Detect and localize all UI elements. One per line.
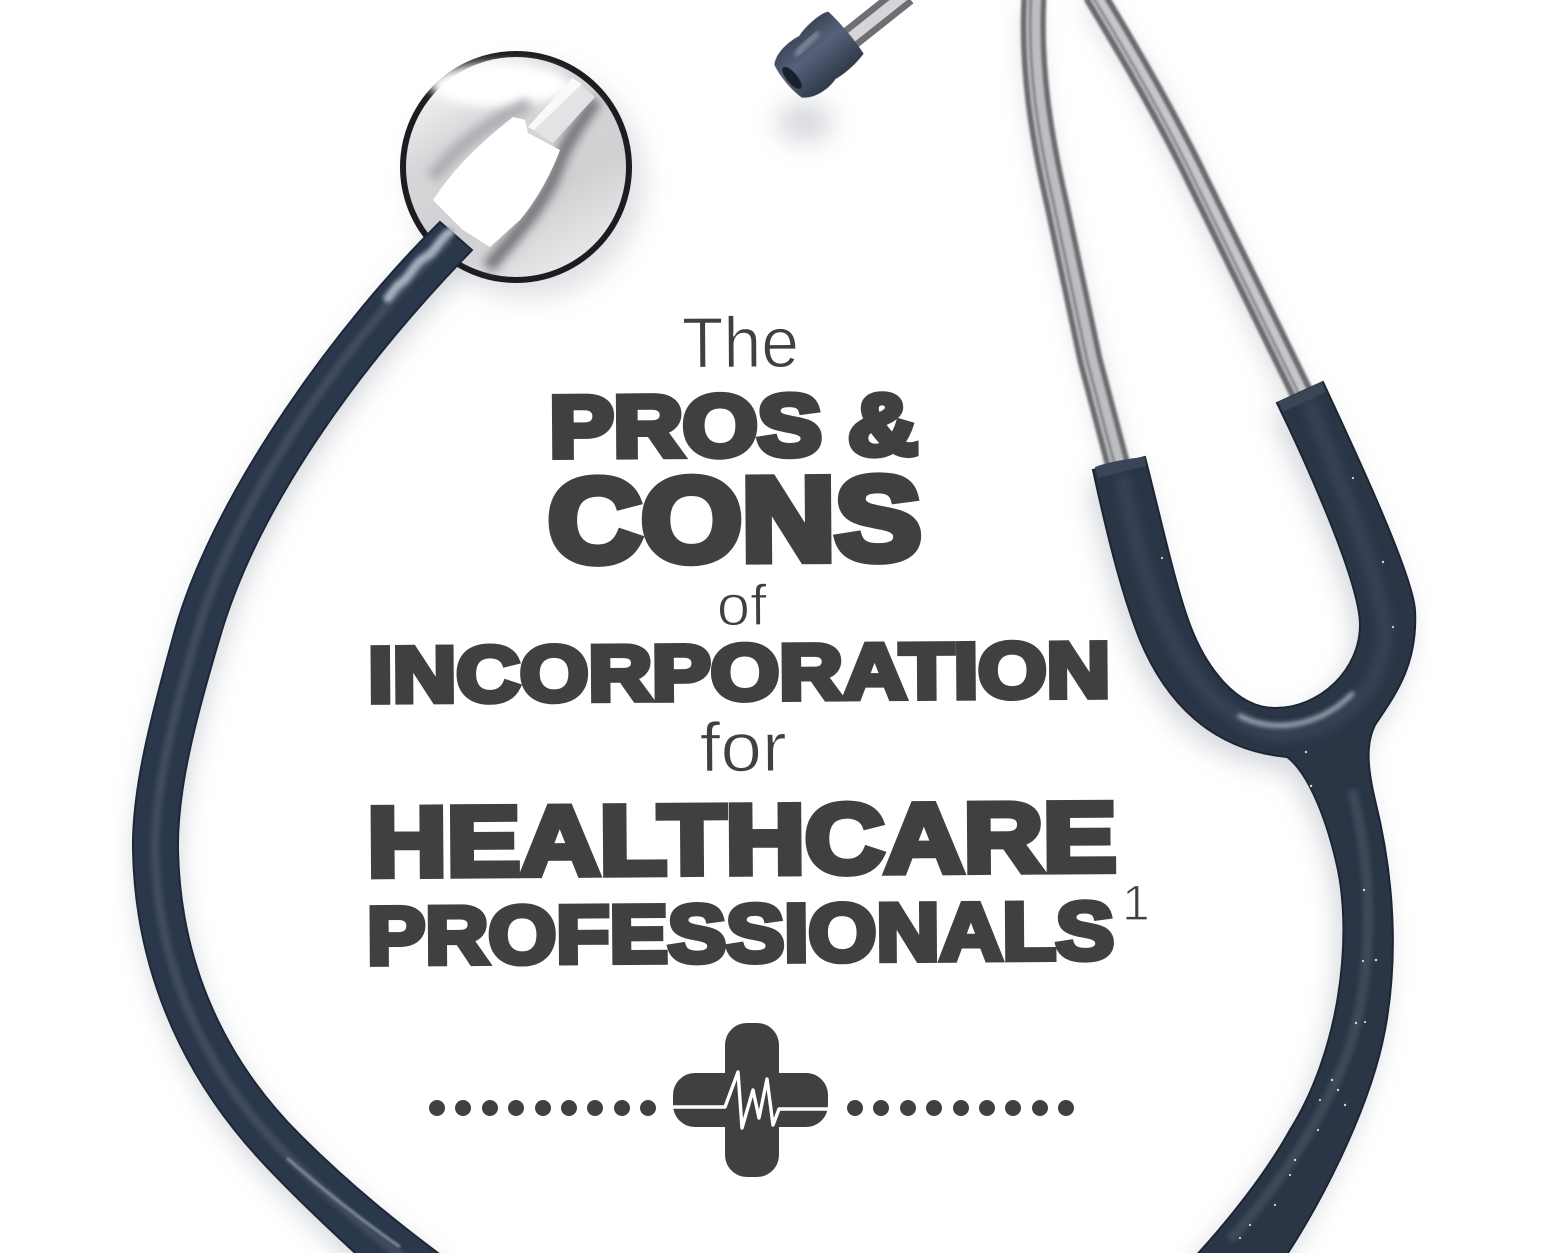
- title line: PROFESSIONALS: PROFESSIONALS: [367, 887, 1114, 982]
- title line: PROS &: PROS &: [549, 377, 918, 476]
- title line: HEALTHCARE: HEALTHCARE: [367, 782, 1117, 897]
- title line: CONS: CONS: [548, 453, 922, 588]
- dotted line right: [847, 1100, 1074, 1116]
- eartip: [767, 0, 906, 106]
- title line: The: The: [682, 303, 799, 384]
- metal binaurals: [1030, 0, 1302, 466]
- dotted line left: [429, 1100, 656, 1116]
- title line: for: for: [699, 708, 787, 787]
- icon: medical cross with pulse: [673, 1023, 830, 1177]
- divider with medical cross: [429, 1023, 1074, 1177]
- chestpiece: [403, 54, 644, 298]
- title line: INCORPORATION: INCORPORATION: [368, 626, 1111, 719]
- superscript: 1: [1122, 875, 1150, 931]
- left tube: [133, 222, 472, 1253]
- title: [363, 301, 1150, 982]
- right tube and yoke: [1093, 382, 1415, 1253]
- title line: of: of: [717, 573, 768, 638]
